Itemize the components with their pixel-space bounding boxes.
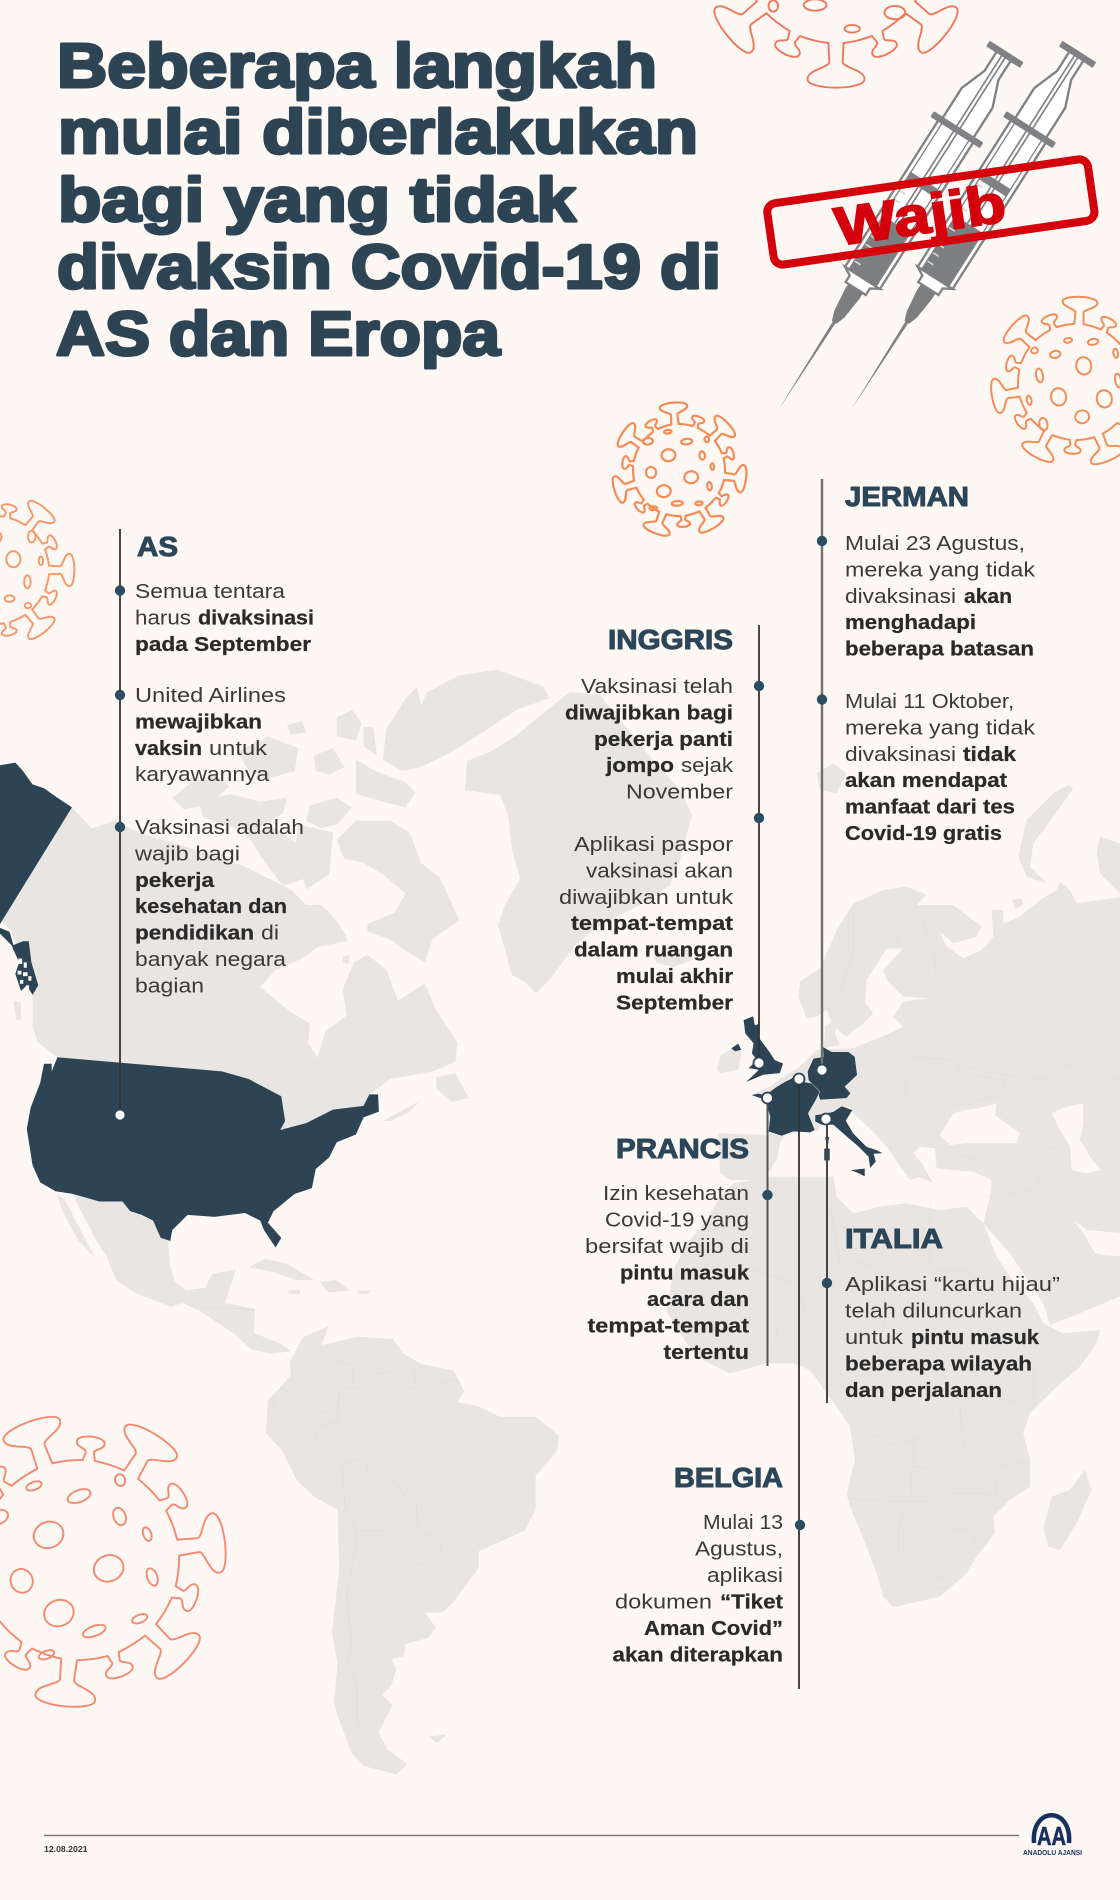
heading: JERMAN: JERMAN bbox=[845, 481, 969, 512]
bullet: kartu hijau: telah diluncurkan bbox=[845, 1300, 1022, 1322]
marker: Germany pin bbox=[816, 1064, 828, 1076]
bullet: kartu hijau: pintu masuk bbox=[911, 1327, 1040, 1349]
title bbox=[56, 32, 721, 369]
bullet: 23 Agustus: mereka yang tidak bbox=[845, 559, 1036, 581]
bullet: United Airlines: mewajibkan bbox=[135, 711, 262, 733]
panel: AS bbox=[114, 529, 314, 1120]
bullet: pekerja kesehatan: bagian bbox=[135, 975, 204, 997]
bullet: 11 Oktober: manfaat dari tes bbox=[845, 797, 1015, 819]
bullet: izin kesehatan: bersifat wajib di bbox=[585, 1236, 749, 1258]
bullet: panti jompo: jompo bbox=[605, 755, 674, 777]
panel: BELGIA bbox=[612, 1074, 805, 1689]
bullet: tentara bbox=[115, 581, 314, 656]
bullet: 11 Oktober: Mulai 11 Oktober, bbox=[845, 691, 1014, 713]
bullet: pekerja kesehatan: di bbox=[261, 923, 279, 945]
bullet: tentara: pada September bbox=[135, 634, 311, 656]
bullet: 23 Agustus: akan bbox=[964, 586, 1012, 608]
bullet: paspor vaksinasi: September bbox=[616, 992, 733, 1014]
title: Beberapa langkah bbox=[57, 32, 657, 101]
marker: Belgium pin bbox=[794, 1074, 804, 1084]
title: AS dan Eropa bbox=[56, 300, 501, 369]
bullet: paspor vaksinasi: dalam ruangan bbox=[574, 940, 733, 962]
bullet: panti jompo: November bbox=[626, 782, 733, 804]
panel: PRANCIS bbox=[585, 1092, 773, 1366]
heading: AS: AS bbox=[137, 531, 178, 562]
bullet: izin kesehatan bbox=[585, 1183, 773, 1364]
bullet: Tiket Aman Covid: dokumen bbox=[615, 1592, 712, 1614]
bullet: pekerja kesehatan: wajib bagi bbox=[134, 843, 240, 865]
virus: centre small bbox=[604, 397, 754, 543]
heading: PRANCIS: PRANCIS bbox=[616, 1133, 749, 1164]
bullet: izin kesehatan: tertentu bbox=[664, 1342, 749, 1364]
bullet: pekerja kesehatan: pendidikan bbox=[135, 923, 254, 945]
heading: BELGIA: BELGIA bbox=[674, 1462, 783, 1493]
map: Eurasia bbox=[717, 763, 1120, 1325]
stamp: Wajib: Wajib bbox=[831, 174, 1010, 258]
logo: Anadolu Ajansi: ANADOLU AJANSI bbox=[1023, 1848, 1082, 1857]
virus: bottom left large bbox=[0, 1371, 270, 1748]
bullet: Tiket Aman Covid: akan diterapkan bbox=[612, 1644, 783, 1666]
bullet: Tiket Aman Covid bbox=[612, 1512, 805, 1666]
virus: left small bbox=[0, 489, 74, 651]
panel: JERMAN bbox=[816, 479, 1036, 1076]
stamp: Wajib bbox=[766, 158, 1096, 267]
bullet: kartu hijau: dan perjalanan bbox=[845, 1380, 1002, 1402]
bullet: kartu hijau: Aplikasi “kartu hijau” bbox=[845, 1274, 1060, 1296]
bullet: 11 Oktober: Covid-19 gratis bbox=[845, 823, 1002, 845]
bullet: Tiket Aman Covid: Aman Covid” bbox=[644, 1618, 783, 1640]
bullet: 11 Oktober: akan mendapat bbox=[845, 770, 1007, 792]
bullet: paspor vaksinasi: tempat-tempat bbox=[571, 913, 733, 935]
bullet: kartu hijau: untuk bbox=[845, 1327, 904, 1349]
bullet: 23 Agustus: divaksinasi bbox=[845, 586, 956, 608]
logo: Anadolu Ajansi bbox=[1023, 1815, 1082, 1857]
bullet: paspor vaksinasi: mulai akhir bbox=[616, 966, 733, 988]
heading: ITALIA: ITALIA bbox=[845, 1223, 943, 1254]
bullet: 11 Oktober bbox=[817, 691, 1036, 845]
title: bagi yang tidak bbox=[58, 166, 577, 235]
bullet: izin kesehatan: pintu masuk bbox=[620, 1262, 750, 1284]
bullet: izin kesehatan: acara dan bbox=[647, 1289, 749, 1311]
bullet: panti jompo bbox=[565, 676, 764, 804]
bullet: 23 Agustus: Mulai 23 Agustus, bbox=[845, 533, 1025, 555]
marker: France pin bbox=[762, 1092, 773, 1104]
virus: top bbox=[694, 0, 978, 88]
map: Canada and Arctic islands bbox=[2, 670, 549, 1130]
bullet: Tiket Aman Covid: “Tiket bbox=[720, 1592, 783, 1614]
bullet: izin kesehatan: Covid-19 yang bbox=[605, 1210, 749, 1232]
bullet: pekerja kesehatan: pekerja bbox=[135, 870, 215, 892]
map: highlighted European countries bbox=[731, 1016, 883, 1177]
bullet: 23 Agustus: beberapa batasan bbox=[845, 639, 1034, 661]
virus: right bbox=[977, 282, 1120, 482]
bullet: United Airlines: United Airlines bbox=[135, 685, 286, 707]
title: divaksin Covid-19 di bbox=[57, 233, 721, 302]
bullet: paspor vaksinasi: vaksinasi akan bbox=[586, 860, 733, 882]
panel: INGGRIS bbox=[559, 624, 764, 1068]
bullet: panti jompo: diwajibkan bagi bbox=[565, 702, 733, 724]
bullet: United Airlines bbox=[115, 685, 286, 786]
bullet: United Airlines: untuk bbox=[209, 738, 268, 760]
logo: Anadolu Ajansi: AA bbox=[1037, 1821, 1066, 1851]
bullet: Tiket Aman Covid: Mulai 13 bbox=[703, 1512, 783, 1534]
bullet: 23 Agustus bbox=[817, 533, 1036, 661]
bullet: izin kesehatan: tempat-tempat bbox=[588, 1316, 749, 1338]
icon: two syringes bbox=[754, 36, 1104, 426]
bullet: 11 Oktober: tidak bbox=[963, 744, 1017, 766]
bullet: 11 Oktober: mereka yang tidak bbox=[845, 717, 1036, 739]
map: United States highlighted bbox=[0, 763, 379, 1247]
bullet: kartu hijau: beberapa wilayah bbox=[845, 1354, 1032, 1376]
marker: Italy pin bbox=[820, 1114, 832, 1124]
map: Africa and Madagascar bbox=[667, 1177, 1100, 1607]
bullet: izin kesehatan: Izin kesehatan bbox=[603, 1183, 749, 1205]
map: Mexico and Central America bbox=[57, 1194, 291, 1354]
bullet: pekerja kesehatan: Vaksinasi adalah bbox=[135, 817, 304, 839]
title: mulai diberlakukan bbox=[58, 98, 698, 167]
bullet: tentara: Semua tentara bbox=[135, 581, 286, 603]
bullet: 11 Oktober: divaksinasi bbox=[845, 744, 956, 766]
bullet: United Airlines: vaksin bbox=[135, 738, 202, 760]
bullet: paspor vaksinasi: diwajibkan untuk bbox=[559, 887, 734, 909]
bullet: panti jompo: sejak bbox=[681, 755, 734, 777]
bullet: paspor vaksinasi: Aplikasi paspor bbox=[574, 834, 733, 856]
bullet: panti jompo: pekerja panti bbox=[594, 729, 733, 751]
marker: USA pin bbox=[114, 1110, 126, 1120]
heading: INGGRIS: INGGRIS bbox=[608, 624, 733, 655]
bullet: tentara: harus bbox=[135, 607, 191, 629]
bullet: Tiket Aman Covid: aplikasi bbox=[707, 1565, 783, 1587]
footer rule and date: 12.08.2021 bbox=[44, 1844, 88, 1854]
bullet: tentara: divaksinasi bbox=[198, 607, 314, 629]
bullet: Tiket Aman Covid: Agustus, bbox=[695, 1538, 783, 1560]
bullet: 23 Agustus: menghadapi bbox=[845, 612, 976, 634]
world map bbox=[2, 670, 1120, 1775]
bullet: United Airlines: karyawannya bbox=[135, 764, 270, 786]
bullet: pekerja kesehatan bbox=[115, 817, 304, 997]
marker: UK pin bbox=[754, 1058, 764, 1068]
bullet: paspor vaksinasi bbox=[559, 813, 764, 1014]
map: Greenland and Iceland bbox=[465, 692, 693, 993]
map: South America and Caribbean bbox=[200, 1259, 559, 1775]
bullet: kartu hijau bbox=[822, 1274, 1060, 1402]
bullet: panti jompo: Vaksinasi telah bbox=[581, 676, 733, 698]
bullet: pekerja kesehatan: kesehatan dan bbox=[135, 896, 287, 918]
panel: ITALIA bbox=[820, 1114, 1060, 1403]
bullet: pekerja kesehatan: banyak negara bbox=[135, 949, 287, 971]
